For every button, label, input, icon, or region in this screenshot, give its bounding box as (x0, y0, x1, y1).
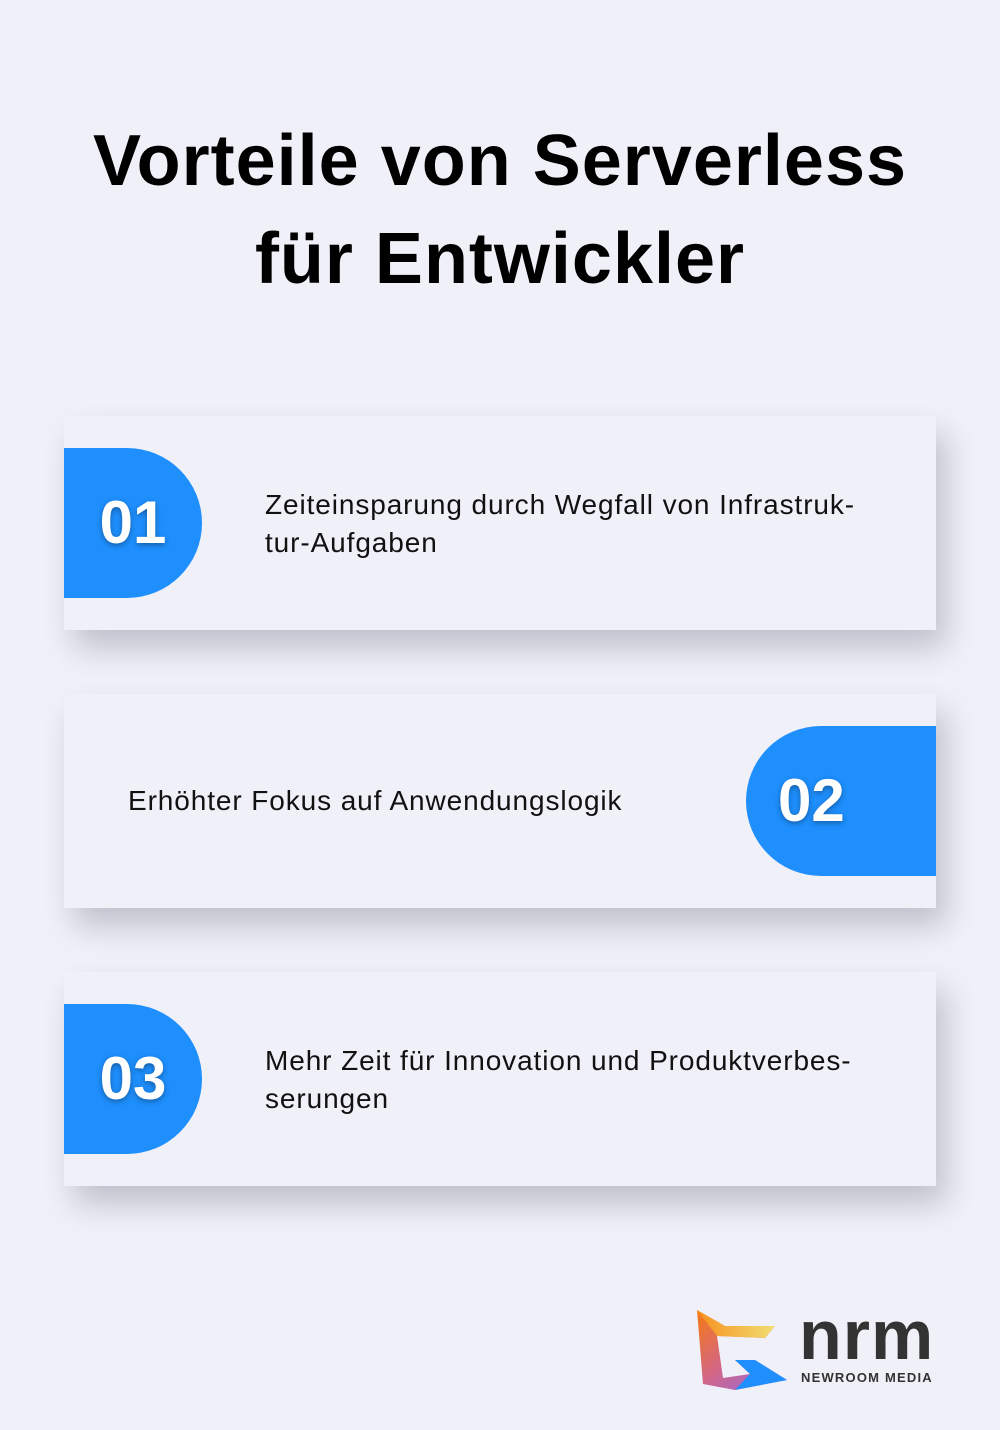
card 2 (64, 694, 936, 908)
text 1: Zeiteinsparung durch Wegfall von Infrastruk- (265, 489, 855, 520)
logo (697, 1296, 934, 1390)
title: für Entwickler (255, 219, 745, 299)
text 3: serungen (265, 1083, 389, 1114)
text 1: tur-Aufgaben (265, 527, 438, 558)
text 1 (265, 489, 855, 558)
title: Vorteile von Serverless (93, 121, 907, 201)
badge 01 (64, 448, 202, 598)
text 2: Erhöhter Fokus auf Anwendungslogik (128, 785, 622, 816)
logo text: nrm (799, 1296, 934, 1374)
text 3: Mehr Zeit für Innovation und Produktverbes- (265, 1045, 852, 1076)
icon: logo mark (697, 1310, 787, 1390)
logo: NEWROOM MEDIA (801, 1370, 933, 1385)
title (93, 121, 907, 299)
card 1 (64, 416, 936, 630)
badge 03: 03 (100, 1045, 166, 1112)
card 3 (64, 972, 936, 1186)
badge 03 (64, 1004, 202, 1154)
badge 01: 01 (100, 489, 166, 556)
text 3 (265, 1045, 852, 1114)
badge 02: 02 (778, 767, 845, 834)
badge 02 (746, 726, 936, 876)
